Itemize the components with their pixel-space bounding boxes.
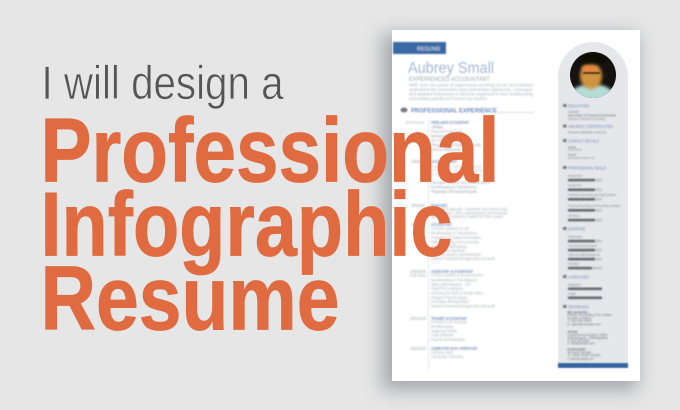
job: accountant: Interact Financial Manager year end audit	[431, 256, 496, 261]
job: accountant: Payroll employees	[431, 244, 467, 249]
references: REFERENCES	[568, 304, 589, 310]
job: assistant accountant: Full-time position at accounting firm	[431, 272, 483, 278]
professional experience heading: PROFESSIONAL EXPERIENCE	[411, 108, 498, 114]
job: assistant accountant: Purchase administration	[431, 299, 470, 304]
job: assistant accountant: Prepare Payroll wages	[431, 295, 467, 300]
references: Accounts Manager	[568, 350, 592, 354]
education: Association of Chartered Accountants	[568, 114, 616, 118]
job: computer data operator: 2003-2005	[410, 346, 427, 351]
job: manager	[411, 203, 508, 219]
job: trainee accountant: Payroll administration	[431, 337, 466, 342]
job: assistant accountant: Invoicing for local & foreign sales	[431, 290, 483, 296]
contact details: aubrey@example.com	[568, 156, 595, 160]
awards and certificates: Previous Member of ACCA	[568, 130, 606, 134]
job: accountant: ACCOUNTANT	[431, 222, 452, 227]
job: freelance accountant: Preparation of Financial Reports	[431, 189, 477, 194]
job: accountant: Sales Invoicing Cost Accounts	[431, 240, 479, 244]
contact details	[563, 138, 599, 160]
education: Diploma in Business Accounting	[568, 117, 605, 121]
resume summary: and assisted businesses to become organized in their bookkeeping,	[409, 92, 534, 96]
timeline line	[427, 120, 430, 370]
job: assistant accountant: Interact Financial Manager year end audit	[431, 304, 496, 308]
resume tab	[393, 42, 446, 54]
job: accountant	[411, 222, 496, 261]
professional skills	[563, 166, 620, 221]
languages: Malaysian	[568, 283, 581, 287]
professional skills: Microsoft Word	[568, 184, 582, 188]
expertise: Financial Auditing	[568, 235, 582, 239]
awards and certificates: AWARDS / CERTIFICATES	[568, 124, 613, 129]
job: freelance accountant: FREELANCE ACCOUNTANT	[431, 120, 469, 125]
resume job title: EXPERIENCED ACCOUNTANT	[409, 77, 490, 83]
resume summary: accounting payroll and income tax returns.	[409, 96, 488, 101]
job: trainee accountant: Balancing Sheets	[431, 328, 457, 334]
heading: I will design a: I will design a	[42, 56, 284, 109]
references: T: 000 000 0000	[568, 339, 590, 343]
resume summary: understand the constraints many businesses experience. I managed	[409, 87, 533, 92]
job: trainee accountant: Bookkeeping	[431, 324, 454, 329]
job: freelance accountant: Accounts payable	[431, 168, 484, 173]
languages: English	[568, 292, 576, 296]
contact details: Mobile	[568, 146, 576, 150]
job: trainee accountant: Full-time in UK accounts	[431, 320, 467, 324]
job: freelance accountant: Bookkeeping to Trial Balance	[431, 184, 478, 190]
references	[563, 304, 612, 361]
professional skills: VAT Returns	[568, 214, 580, 218]
references: E: eileen@example.com	[568, 357, 594, 361]
title line: Professional: Professional	[40, 100, 500, 202]
references: Partner, Accounting Firm Limited	[568, 313, 612, 317]
job: freelance accountant: Financial analysis	[431, 172, 487, 177]
references: Selangor, Malaysia	[568, 336, 608, 340]
contact details: CONTACT DETAILS	[568, 138, 599, 144]
job: computer data operator: Computer Operator	[431, 354, 464, 359]
job: accountant: Preparation of Creditors Reconciliation	[431, 235, 481, 240]
job: freelance accountant: 2014-Present	[406, 120, 425, 125]
job: assistant accountant: Payroll for employees	[431, 286, 463, 291]
job: computer data operator: COMPUTER DATA OPERATOR	[431, 346, 477, 351]
job: manager: Managed payroll, customer accounts and	[431, 206, 508, 212]
professional skills: Microsoft Excel	[568, 174, 582, 178]
expertise: Client and Staff Management	[568, 253, 600, 257]
job: freelance accountant: Bookkeeping	[431, 138, 462, 143]
sidebar content	[563, 104, 620, 361]
resume name: Aubrey Small	[408, 60, 494, 77]
job: accountant: Bookkeeping to Trial Balance	[431, 230, 478, 236]
job: freelance accountant: Manager service and auditor liaison	[431, 180, 492, 185]
job: trainee accountant: TRAINEE ACCOUNTANT	[431, 316, 467, 321]
references: T: 000 000 0000	[568, 319, 592, 323]
job: freelance accountant: Management Accounts	[431, 134, 467, 138]
references: MRS. SALINA KHAN	[568, 310, 588, 314]
awards and certificates	[563, 124, 613, 134]
references: LEE KEONG	[568, 330, 578, 334]
job: freelance accountant: 2010-2014	[411, 159, 426, 164]
resume document	[382, 30, 640, 390]
resume summary: With over six years of experience working as an accountant I	[409, 82, 534, 88]
languages	[563, 274, 602, 299]
references: Chartered Accountant Limited	[568, 333, 608, 337]
expertise: EXPERTISE	[568, 226, 585, 232]
job: manager: affairs in the property market for three years	[431, 214, 503, 219]
expertise: Financial Accounting Reports	[568, 244, 597, 248]
resume tab: RESUME	[417, 46, 441, 52]
job: assistant accountant	[410, 269, 496, 308]
job: accountant: Full-time position in UK	[431, 226, 469, 231]
paper shadow	[382, 34, 638, 390]
job: accountant: 2008-2009	[411, 222, 426, 227]
sidebar footer bar	[558, 363, 628, 368]
job: trainee accountant	[410, 316, 467, 342]
job: manager: 2009-2010	[411, 203, 426, 208]
references: E: lee@example.com	[568, 342, 595, 346]
professional skills: Peachtree Accounting and Sage software	[568, 193, 616, 197]
references: E: salina@example.com	[568, 322, 601, 326]
job: freelance accountant: Payroll Expenses	[431, 129, 463, 134]
job: freelance accountant	[406, 120, 492, 194]
expertise	[563, 226, 602, 269]
paper	[392, 30, 640, 381]
contact details: Email	[568, 153, 576, 157]
references: Kuala Lumpur	[568, 316, 592, 320]
profile photo	[570, 52, 616, 98]
job: freelance accountant: VAT Returns	[431, 124, 443, 130]
education: EDUCATION	[568, 104, 589, 108]
job: freelance accountant: Preparation of Financial Reports	[431, 142, 481, 148]
resume summary	[409, 82, 534, 101]
job: accountant: Pensions system administration	[431, 252, 482, 257]
references: EILEEN ADAMS	[568, 348, 586, 352]
title line: Resume: Resume	[40, 248, 340, 350]
job: accountant: Accounts reports	[431, 248, 465, 253]
languages: LANGUAGES	[568, 274, 589, 280]
sidebar arch	[558, 42, 628, 367]
job: trainee accountant: 2005-2006	[410, 316, 427, 321]
resume main column	[393, 42, 534, 370]
education: Certificate	[568, 110, 579, 114]
title line: Infographic: Infographic	[40, 174, 452, 276]
professional skills: PROFESSIONAL SKILLS	[568, 166, 606, 170]
job: freelance accountant: ACCOUNTANT	[431, 159, 457, 164]
job: manager: administration, office administration and financial	[431, 210, 507, 216]
contact details: 07000 000000	[568, 148, 582, 152]
job: computer data operator: Full-time work	[431, 350, 454, 355]
expertise: Translation	[568, 262, 579, 266]
references: T: 000 000 0000	[568, 354, 601, 358]
job: assistant accountant: ASSISTANT ACCOUNTANT	[431, 269, 473, 274]
education	[563, 104, 616, 121]
job: freelance accountant: Full-time employment	[431, 164, 482, 169]
professional skills: Financial Reporting and Accounting Software	[568, 204, 620, 208]
job: assistant accountant: Full-time	[410, 273, 427, 278]
job: assistant accountant: Bookkeeping to Trial Balance	[431, 278, 478, 282]
job: freelance accountant: Income Statements	[431, 147, 461, 152]
job: manager: MANAGER	[431, 203, 447, 208]
job: assistant accountant: 2006-2008	[410, 269, 427, 274]
job: trainee accountant: Audit Assistant	[431, 332, 454, 338]
job: computer data operator	[410, 346, 477, 359]
job: assistant accountant: Sales administration - VAT	[431, 282, 471, 287]
